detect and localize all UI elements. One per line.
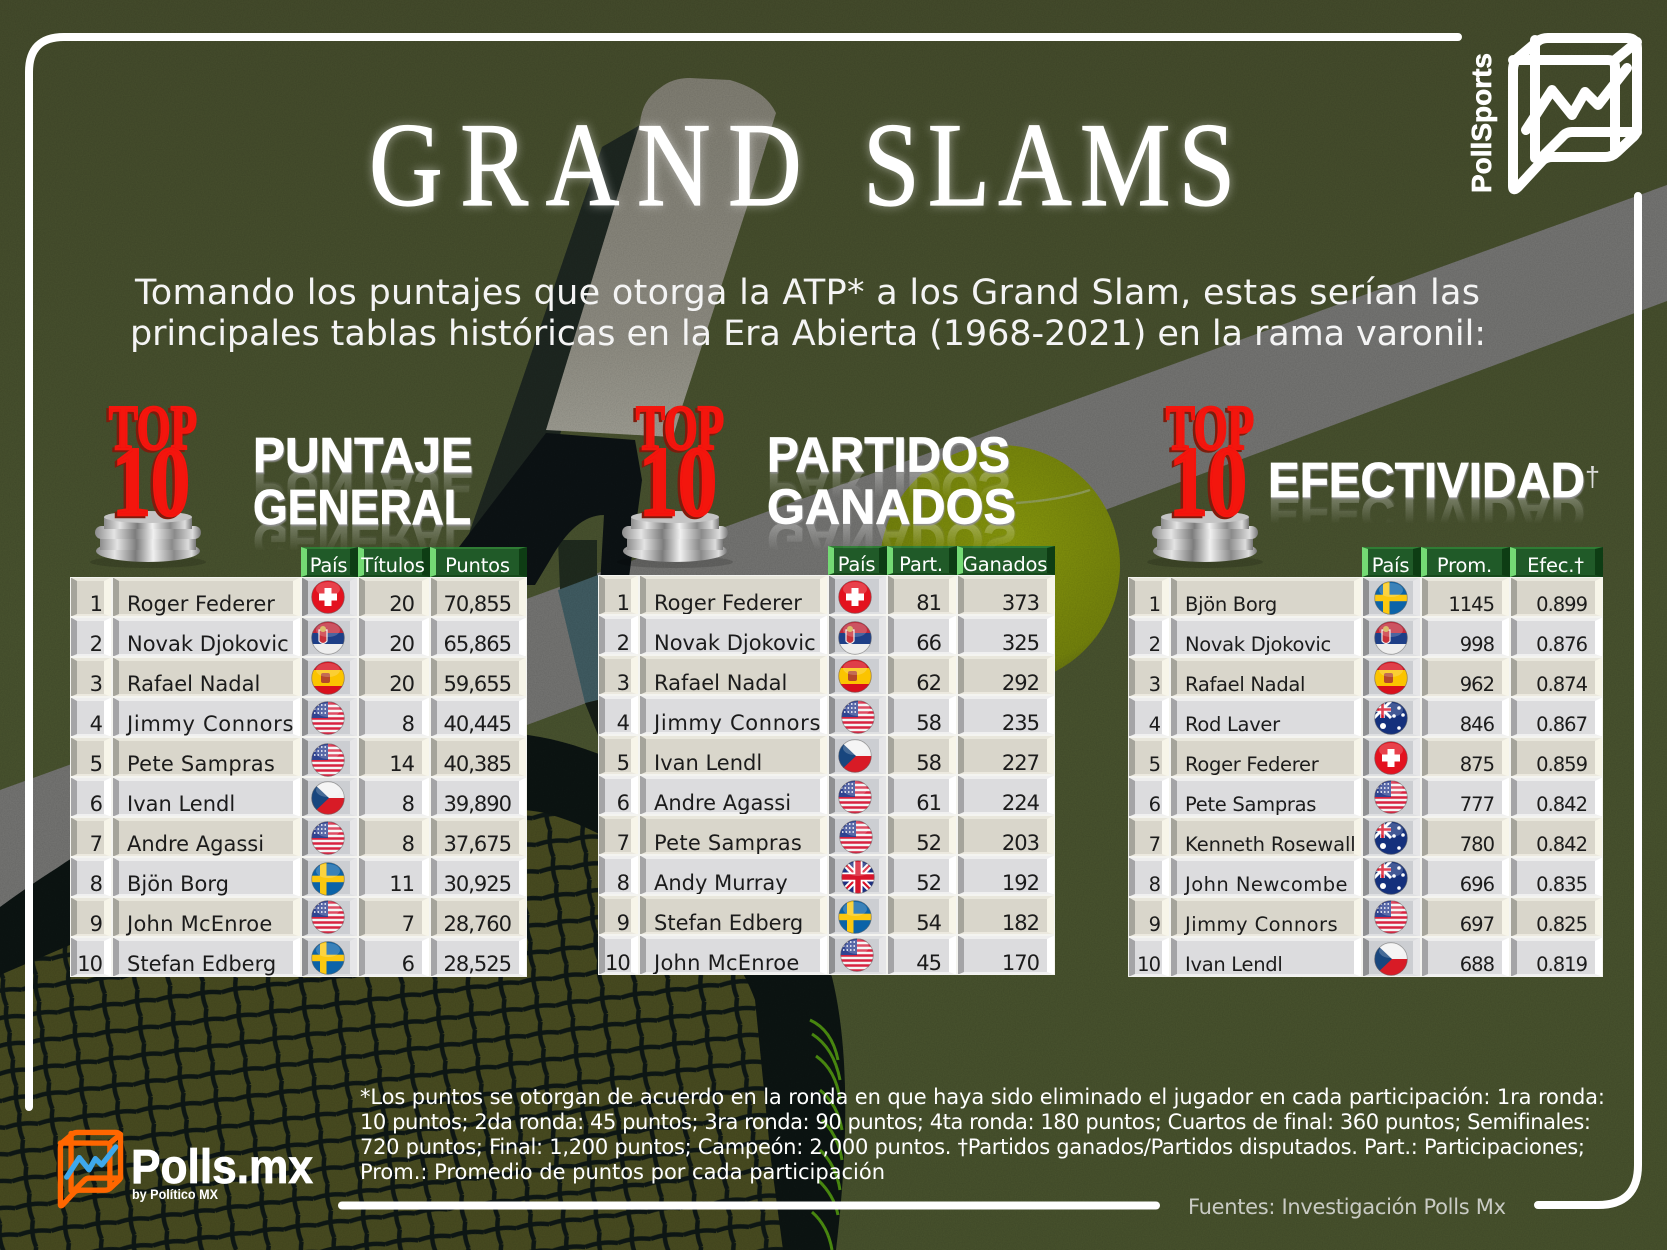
table: partidos ganados: Roger Federer	[654, 591, 802, 615]
racket shadow on court	[460, 125, 640, 560]
footnote: 10 puntos; 2da ronda: 45 puntos; 3ra ronda: 90 puntos; 4ta ronda: 180 puntos; Cuartos de final: 360 puntos; Semifinales:	[360, 1110, 1591, 1134]
footnote	[360, 1085, 1605, 1184]
table: puntaje general: 7	[90, 832, 102, 856]
table: partidos ganados: 6	[617, 791, 629, 815]
table: puntaje general: 1	[90, 592, 102, 616]
subtitle	[130, 273, 1486, 354]
table: efectividad: 0.835	[1536, 873, 1587, 896]
table: efectividad: 3	[1149, 673, 1160, 696]
tennis ball	[880, 445, 1120, 685]
table: puntaje general: 20	[389, 672, 414, 696]
table: puntaje general: 65,865	[444, 632, 511, 656]
source line: Fuentes: Investigación Polls Mx	[1188, 1195, 1506, 1219]
table: partidos ganados: 9	[617, 911, 629, 935]
table: puntaje general: 8	[90, 872, 102, 896]
table: partidos ganados: 203	[1002, 831, 1039, 855]
icon: top 10 trophy 3	[1147, 392, 1263, 568]
title: GRAND	[369, 99, 802, 232]
table: partidos ganados: 62	[916, 671, 941, 695]
racket strings	[0, 780, 800, 1250]
table: puntaje general: Roger Federer	[127, 592, 275, 616]
table: puntaje general: 28,525	[444, 952, 511, 976]
table: efectividad: Roger Federer	[1185, 753, 1318, 776]
table: partidos ganados: 170	[1002, 951, 1039, 975]
table: efectividad: 5	[1149, 753, 1160, 776]
table header: País	[310, 554, 347, 577]
footnote: 720 puntos; Final: 1,200 puntos; Campeón: 2,000 puntos. †Partidos ganados/Partidos disputados. Part.: Participaciones;	[360, 1135, 1585, 1159]
heading: partidos ganados	[768, 436, 1016, 547]
table: efectividad: 10	[1137, 953, 1160, 976]
table: puntaje general: 5	[90, 752, 102, 776]
table: efectividad: 962	[1460, 673, 1494, 696]
table: puntaje general: 8	[402, 792, 414, 816]
icon: Polls.mx logo	[60, 1132, 121, 1206]
table: efectividad: 696	[1460, 873, 1494, 896]
table: efectividad: 8	[1149, 873, 1160, 896]
table: efectividad: Ivan Lendl	[1185, 953, 1282, 976]
table header: Puntos	[445, 554, 510, 577]
table header: País	[838, 553, 875, 576]
table: partidos ganados: 2	[617, 631, 629, 655]
table: partidos ganados: John McEnroe	[654, 951, 800, 975]
table: partidos ganados: 54	[916, 911, 941, 935]
table: partidos ganados: 58	[916, 751, 941, 775]
footnote: *Los puntos se otorgan de acuerdo en la ronda en que haya sido eliminado el jugador en cada participación: 1ra ronda:	[360, 1085, 1605, 1109]
table: efectividad: 0.825	[1536, 913, 1587, 936]
table: puntaje general: 40,445	[444, 712, 511, 736]
table: puntaje general: 2	[90, 632, 102, 656]
table: puntaje general: Jimmy Connors	[127, 712, 294, 736]
table: efectividad: 846	[1460, 713, 1494, 736]
heading: puntaje general: PUNTAJE	[253, 429, 473, 483]
table: partidos ganados: 7	[617, 831, 629, 855]
flags: partidos ganados	[838, 580, 875, 972]
table header: Prom.	[1437, 554, 1492, 577]
table: partidos ganados: 61	[916, 791, 941, 815]
table: puntaje general: 70,855	[444, 592, 511, 616]
table: efectividad: 0.867	[1536, 713, 1587, 736]
table: puntaje general: Bjön Borg	[127, 872, 229, 896]
table: puntaje general: 14	[389, 752, 414, 776]
table: partidos ganados: 235	[1002, 711, 1039, 735]
table: efectividad: Bjön Borg	[1185, 593, 1277, 616]
racket frame lime accents	[810, 1020, 842, 1250]
table: efectividad: Pete Sampras	[1185, 793, 1316, 816]
table: partidos ganados: 224	[1002, 791, 1039, 815]
table: efectividad: 777	[1460, 793, 1494, 816]
flags: puntaje general	[311, 580, 345, 975]
table: puntaje general: 7	[402, 912, 414, 936]
table: puntaje general: 4	[90, 712, 102, 736]
icon: top 10 trophy 1: 10	[112, 426, 190, 537]
footnote: Prom.: Promedio de puntos por cada participación	[360, 1160, 885, 1184]
table: puntaje general: 39,890	[444, 792, 511, 816]
table: puntaje general: 59,655	[444, 672, 511, 696]
racket head frame	[0, 732, 845, 1250]
table: efectividad: Novak Djokovic	[1185, 633, 1331, 656]
table: efectividad: Jimmy Connors	[1185, 913, 1338, 936]
table: puntaje general: Rafael Nadal	[127, 672, 260, 696]
table: puntaje general: 6	[402, 952, 414, 976]
table: puntaje general: 20	[389, 592, 414, 616]
table: partidos ganados: Andy Murray	[654, 871, 788, 895]
table: partidos ganados: 325	[1002, 631, 1039, 655]
PollSports label: PollSports	[1466, 53, 1497, 193]
table: puntaje general: 40,385	[444, 752, 511, 776]
icon: top 10 trophy 1: TOP	[109, 392, 197, 463]
icon: top 10 trophy 2: 10	[639, 426, 717, 537]
icon: top 10 trophy 3: TOP	[1166, 392, 1254, 463]
racket grip	[546, 78, 776, 437]
table: puntaje general: 6	[90, 792, 102, 816]
subtitle: principales tablas históricas en la Era Abierta (1968-2021) en la rama varonil:	[130, 314, 1486, 354]
flags: efectividad	[1374, 581, 1408, 976]
Polls.mx wordmark: Polls.mx	[131, 1141, 313, 1194]
table: partidos ganados: 10	[605, 951, 630, 975]
table: efectividad: 9	[1149, 913, 1160, 936]
icon: top 10 trophy 3: 10	[1169, 426, 1247, 537]
table: puntaje general	[70, 547, 527, 977]
racket throat	[445, 433, 642, 585]
heading: partidos ganados: GANADOS	[767, 480, 1016, 534]
table: efectividad: 0.899	[1536, 593, 1587, 616]
Polls.mx wordmark: by Político MX	[132, 1186, 219, 1202]
table: puntaje general: 37,675	[444, 832, 511, 856]
table: efectividad: Rafael Nadal	[1185, 673, 1305, 696]
table header	[1362, 547, 1603, 577]
table: efectividad: Rod Laver	[1185, 713, 1280, 736]
table header: Efec.†	[1527, 554, 1584, 577]
table header: País	[1372, 554, 1409, 577]
table: efectividad: 7	[1149, 833, 1160, 856]
table: puntaje general: 8	[402, 832, 414, 856]
table: partidos ganados: 5	[617, 751, 629, 775]
table: efectividad: 0.842	[1536, 833, 1587, 856]
table: efectividad: 0.876	[1536, 633, 1587, 656]
table: efectividad: 6	[1149, 793, 1160, 816]
table: partidos ganados: Stefan Edberg	[654, 911, 803, 935]
table: partidos ganados: 58	[916, 711, 941, 735]
table: puntaje general: 3	[90, 672, 102, 696]
table: efectividad: 688	[1460, 953, 1494, 976]
table: efectividad: 4	[1149, 713, 1160, 736]
table header: Títulos	[361, 554, 425, 577]
table header	[828, 546, 1055, 576]
table: partidos ganados: 373	[1002, 591, 1039, 615]
table: partidos ganados: Jimmy Connors	[654, 711, 821, 735]
heading: puntaje general: GENERAL	[253, 481, 471, 535]
table: partidos ganados: 1	[617, 591, 629, 615]
heading: partidos ganados: PARTIDOS	[767, 428, 1010, 482]
table: partidos ganados	[598, 546, 1055, 975]
icon: top 10 trophy 2	[617, 392, 733, 568]
table: efectividad: 697	[1460, 913, 1494, 936]
table: efectividad: 875	[1460, 753, 1494, 776]
table: efectividad: 1145	[1448, 593, 1494, 616]
heading: efectividad	[1270, 462, 1598, 520]
table: puntaje general: Stefan Edberg	[127, 952, 276, 976]
table: partidos ganados: 3	[617, 671, 629, 695]
table: partidos ganados: 4	[617, 711, 629, 735]
table: puntaje general: 10	[77, 952, 102, 976]
subtitle: Tomando los puntajes que otorga la ATP* a los Grand Slam, estas serían las	[134, 273, 1480, 313]
table: partidos ganados: 292	[1002, 671, 1039, 695]
icon: top 10 trophy 1	[90, 392, 206, 568]
table: partidos ganados: Pete Sampras	[654, 831, 802, 855]
icon: top 10 trophy 2: TOP	[636, 392, 724, 463]
table: partidos ganados: Ivan Lendl	[654, 751, 762, 775]
table: puntaje general: Ivan Lendl	[127, 792, 235, 816]
table header	[301, 547, 527, 577]
table: efectividad: Kenneth Rosewall	[1185, 833, 1356, 856]
table: efectividad: 0.819	[1536, 953, 1587, 976]
table: partidos ganados: 192	[1002, 871, 1039, 895]
table: efectividad: 0.874	[1536, 673, 1587, 696]
table: efectividad: 1	[1149, 593, 1160, 616]
table: puntaje general: Novak Djokovic	[127, 632, 289, 656]
table: efectividad: 0.842	[1536, 793, 1587, 816]
table header: Part.	[899, 553, 943, 576]
table: partidos ganados: 81	[916, 591, 941, 615]
table: partidos ganados: Novak Djokovic	[654, 631, 816, 655]
title: SLAMS	[863, 99, 1235, 232]
table: partidos ganados: 52	[916, 831, 941, 855]
table: puntaje general: 20	[389, 632, 414, 656]
table: puntaje general: 9	[90, 912, 102, 936]
table: partidos ganados: Rafael Nadal	[654, 671, 787, 695]
table: partidos ganados: Andre Agassi	[654, 791, 791, 815]
table: efectividad: John Newcombe	[1185, 873, 1348, 896]
table header: Ganados	[963, 553, 1047, 576]
table: efectividad	[1128, 547, 1603, 977]
table: partidos ganados: 52	[916, 871, 941, 895]
title	[369, 99, 1235, 232]
table: efectividad: 780	[1460, 833, 1494, 856]
heading: efectividad: EFECTIVIDAD	[1268, 454, 1585, 508]
table: puntaje general: John McEnroe	[127, 912, 273, 936]
icon: PollSports logo	[1513, 38, 1637, 189]
table: puntaje general: 30,925	[444, 872, 511, 896]
heading: puntaje general	[254, 438, 473, 548]
table: puntaje general: Andre Agassi	[127, 832, 264, 856]
table: puntaje general: 28,760	[444, 912, 511, 936]
table: puntaje general: Pete Sampras	[127, 752, 275, 776]
heading: efectividad: †	[1585, 461, 1600, 492]
table: efectividad: 2	[1149, 633, 1160, 656]
table: puntaje general: 8	[402, 712, 414, 736]
table: partidos ganados: 227	[1002, 751, 1039, 775]
table: efectividad: 998	[1460, 633, 1494, 656]
table: puntaje general: 11	[389, 872, 414, 896]
table: efectividad: 0.859	[1536, 753, 1587, 776]
court line	[0, 185, 1667, 921]
table: partidos ganados: 45	[916, 951, 941, 975]
table: partidos ganados: 66	[916, 631, 941, 655]
table: partidos ganados: 182	[1002, 911, 1039, 935]
table: partidos ganados: 8	[617, 871, 629, 895]
